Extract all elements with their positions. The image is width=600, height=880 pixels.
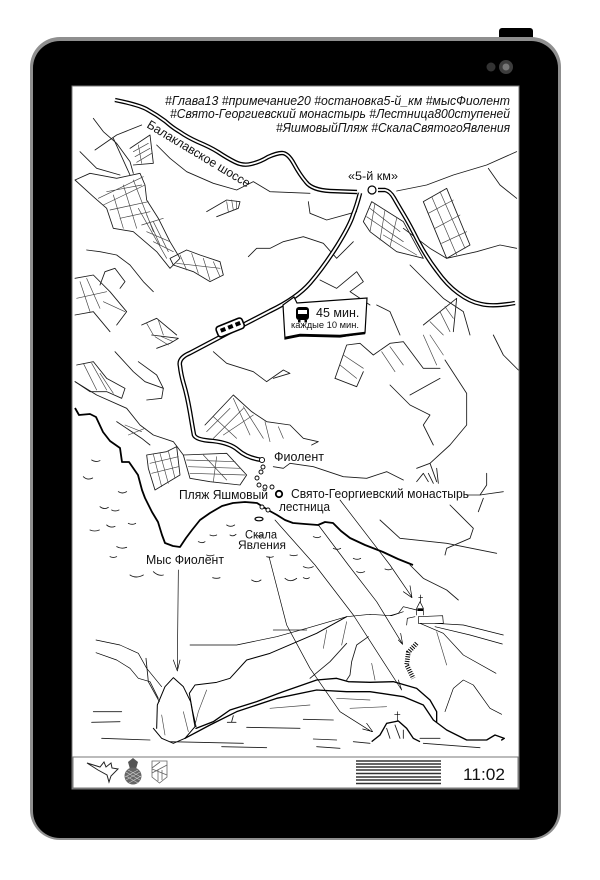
label: rock: Явления [238, 540, 286, 552]
callout: bus time: 45 мин. [316, 306, 359, 320]
coastline [75, 408, 413, 565]
hashtags [165, 94, 510, 135]
label: Fiolent: Фиолент [274, 449, 324, 464]
clock: 11:02 [463, 765, 505, 784]
screen [72, 86, 519, 789]
icon: feather logo [87, 762, 118, 782]
label: rock [238, 530, 286, 552]
sea waves, lower [130, 567, 392, 582]
map: lower thin terrain lines [75, 335, 518, 555]
hashtags: #Свято-Георгиевский монастырь #Лестница800ступеней [170, 107, 510, 121]
stairs trail and monastery marker [255, 457, 282, 521]
callout: bus time [283, 297, 367, 339]
icon: pineapple emblem [124, 758, 142, 784]
taskbar [73, 757, 518, 788]
camera lenses [486, 60, 513, 74]
label: cape: Мыс Фиолент [146, 553, 224, 567]
road label: Балаклавское шоссе [144, 118, 253, 190]
Balaklava highway road [115, 100, 515, 305]
stairs on slope [407, 643, 417, 678]
label: Yashmovy beach: Пляж Яшмовый [179, 488, 268, 502]
label: stairs: лестница [279, 500, 330, 514]
sea waves [83, 460, 361, 559]
apparition rock with cross [372, 712, 420, 742]
label: rock: Скала [245, 530, 278, 542]
stop: 5th km [368, 186, 376, 194]
icon: bus [296, 307, 309, 322]
bus drawing on road [215, 317, 245, 338]
arrows from labels to panorama [173, 500, 412, 732]
map: upper thin terrain lines [75, 118, 517, 335]
icon: shield emblem [152, 761, 167, 783]
label: 5th km: «5-й км» [348, 169, 398, 183]
bus route road [180, 193, 360, 460]
battery stripes [356, 761, 441, 784]
hashtags: #Глава13 #примечание20 #остановка5-й_км #мысФиолент [165, 94, 510, 108]
hashtags: #ЯшмовыйПляж #СкалаСвятогоЯвления [276, 121, 510, 135]
label: monastery: Свято-Георгиевский монастырь [291, 487, 469, 501]
monastery on cliff [390, 595, 443, 625]
callout: bus time: каждые 10 мин. [291, 320, 359, 331]
coastal panorama sketch [92, 565, 504, 748]
